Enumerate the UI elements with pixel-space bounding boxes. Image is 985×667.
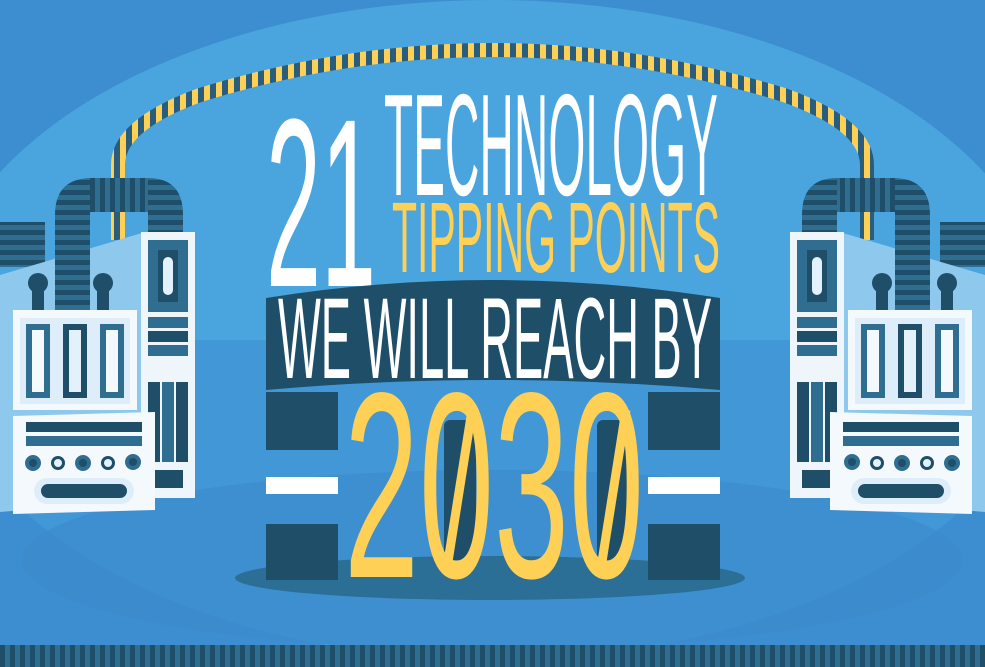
side bars [266,392,720,580]
machine: right [790,178,985,514]
year 2030 [344,338,644,634]
year 2030: 2030 [344,338,644,634]
banner [266,275,720,403]
machine: left [0,178,195,514]
floor shadow [235,556,745,600]
bottom stripe [0,645,985,667]
cable arch [118,50,867,240]
infographic: 21 [266,69,376,337]
